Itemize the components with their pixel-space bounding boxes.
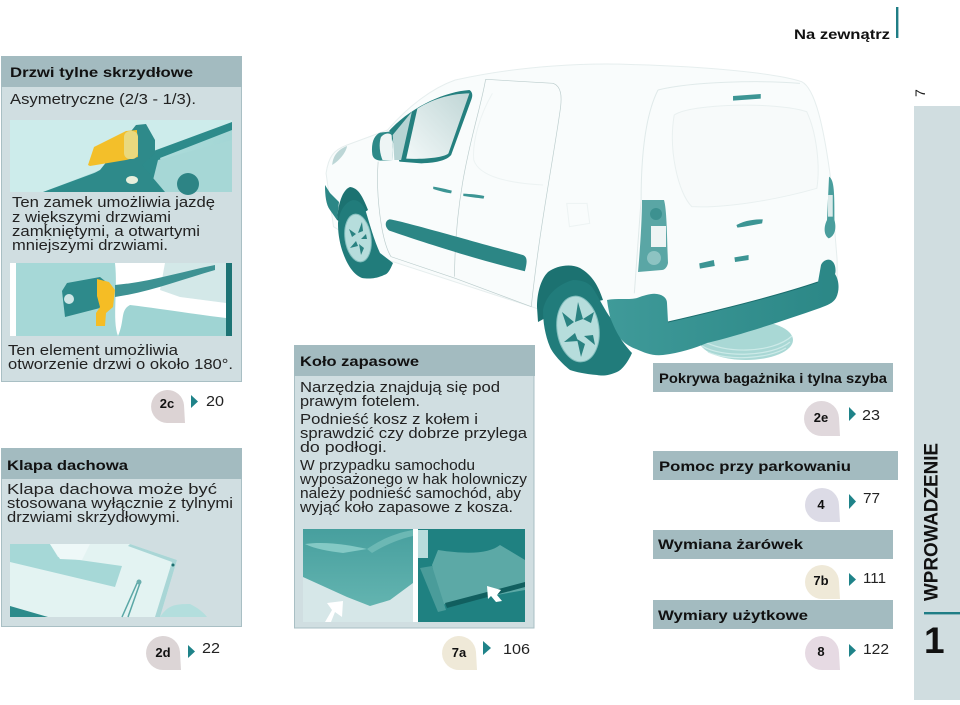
text: door check description: otworzenie drzwi o około 180°.: [8, 357, 233, 373]
heading: Koło zapasowe: [300, 353, 419, 369]
reference: 8 page 122: 8: [817, 644, 825, 659]
right tail lamp: [825, 177, 835, 238]
reference: 4 page 77: [805, 488, 880, 522]
reference: 2d page 22: [146, 636, 220, 670]
reference: 2e page 23: 2e: [814, 410, 828, 425]
reference: 2c page 20: 2c: [160, 396, 174, 411]
heading: Klapa dachowa: [7, 457, 128, 473]
boot badges: [699, 255, 749, 269]
reference: 8 page 122: [805, 636, 889, 670]
text: spare wheel instructions: Narzędzia znajdują się pod: [300, 380, 500, 396]
front rim: [342, 212, 374, 264]
reference: 7a page 106: 7a: [452, 645, 467, 660]
reference: 2d page 22: 2d: [155, 645, 171, 660]
chapter title: WPROWADZENIE: [922, 443, 942, 601]
sidebar: chapter tab: [914, 106, 960, 700]
page number: 7: [912, 89, 928, 97]
panel: Klapa dachowa: [1, 448, 242, 626]
heading: [294, 345, 535, 376]
bumper: [607, 260, 839, 355]
reference: 2c page 20: 20: [206, 394, 224, 410]
door seams: [378, 79, 561, 307]
front side window: [389, 90, 472, 163]
heading: Wymiana żarówek: [653, 530, 893, 559]
text: lock description: [12, 195, 215, 254]
side handles: [433, 187, 484, 199]
heading: Drzwi tylne skrzydłowe: [10, 64, 193, 80]
high stop lamp: [733, 94, 761, 101]
rear tyre: [543, 280, 632, 376]
reference: 7a page 106: 106: [503, 642, 530, 658]
image: roof flap: [10, 544, 207, 617]
reference: 2e page 23: 23: [862, 408, 880, 424]
text: spare wheel instructions: wyposażonego w hak holowniczy: [299, 472, 528, 488]
rear door outline and window: [634, 82, 800, 293]
text: lock description: Ten zamek umożliwia jazdę: [12, 195, 215, 211]
arrow: [487, 586, 502, 602]
arrow: [325, 601, 343, 622]
text: spare wheel instructions: sprawdzić czy dobrze przylega: [300, 426, 528, 442]
heading: [1, 448, 242, 479]
reference: 7b page 111: [805, 565, 886, 599]
front wing: [325, 185, 339, 220]
heading: [1, 56, 242, 87]
text: spare wheel instructions: należy podnieść samochód, aby: [300, 486, 522, 502]
spare wheel: [699, 320, 793, 360]
reference: 4 page 77: 77: [863, 491, 880, 507]
panel: Koło zapasowe: [294, 345, 535, 628]
heading: Wymiary użytkowe: [653, 600, 893, 629]
text: lock description: mniejszymi drzwiami.: [12, 238, 168, 254]
reference: 4 page 77: 4: [817, 497, 825, 512]
reference: 2d page 22: 22: [202, 641, 220, 657]
heading: Pomoc przy parkowaniu: Pomoc przy parkowaniu: [659, 458, 851, 474]
text: door check description: [8, 343, 233, 373]
chapter number: 1: [924, 620, 945, 661]
text: lock description: z większymi drzwiami: [12, 210, 171, 226]
section title: Na zewnątrz: Na zewnątrz: [794, 26, 890, 42]
rear wheel arch: [537, 265, 603, 322]
headlight: [332, 146, 347, 165]
section title: Na zewnątrz: [794, 7, 898, 42]
reference: 8 page 122: 122: [863, 642, 889, 658]
rear rim: [553, 293, 603, 365]
text: spare wheel instructions: prawym fotelem.: [300, 394, 420, 410]
image: seat: [303, 529, 413, 622]
heading: Wymiary użytkowe: Wymiary użytkowe: [658, 607, 808, 623]
body: [326, 64, 837, 343]
image: door check: [10, 263, 232, 336]
reference: 7b page 111: 7b: [813, 573, 829, 588]
text: roof flap description: stosowana wyłącznie z tylnymi: [7, 496, 233, 512]
text: lock description: zamkniętymi, a otwartymi: [12, 224, 200, 240]
panel: Drzwi tylne skrzydłowe: [1, 56, 242, 382]
text: spare wheel instructions: wyjąć koło zapasowe z kosza.: [299, 500, 513, 516]
left tail lamp: [638, 200, 668, 272]
heading: Wymiana żarówek: Wymiana żarówek: [658, 536, 803, 552]
reference: 7b page 111: 111: [863, 571, 886, 587]
image: door lock: [10, 120, 232, 195]
reference: 2c page 20: [151, 390, 224, 423]
mirror: [372, 131, 393, 161]
illustration: van: [325, 64, 839, 376]
text: spare wheel instructions: do podłogi.: [300, 440, 387, 456]
boot handle: [736, 219, 763, 228]
front wheel arch: [337, 187, 368, 225]
heading: Pokrywa bagażnika i tylna szyba: [653, 363, 893, 392]
text: roof flap description: Klapa dachowa może być: [7, 482, 217, 498]
text: spare wheel instructions: Podnieść kosz z kołem i: [300, 412, 478, 428]
text: roof flap description: drzwiami skrzydłowymi.: [7, 510, 180, 526]
reference: 7a page 106: [442, 636, 530, 670]
heading: Pokrywa bagażnika i tylna szyba: Pokrywa bagażnika i tylna szyba: [659, 370, 887, 386]
heading: Pomoc przy parkowaniu: [653, 451, 898, 480]
front tyre: [338, 200, 393, 279]
side rubbing strip: [386, 219, 527, 271]
text: door check description: Ten element umożliwia: [8, 343, 179, 359]
image: spare wheel basket: [418, 529, 525, 622]
text: asymmetry: Asymetryczne (2/3 - 1/3).: [10, 91, 196, 108]
text: spare wheel instructions: [299, 380, 528, 516]
text: spare wheel instructions: W przypadku samochodu: [300, 458, 475, 474]
reference: 2e page 23: [804, 401, 880, 436]
text: roof flap description: [7, 482, 233, 526]
